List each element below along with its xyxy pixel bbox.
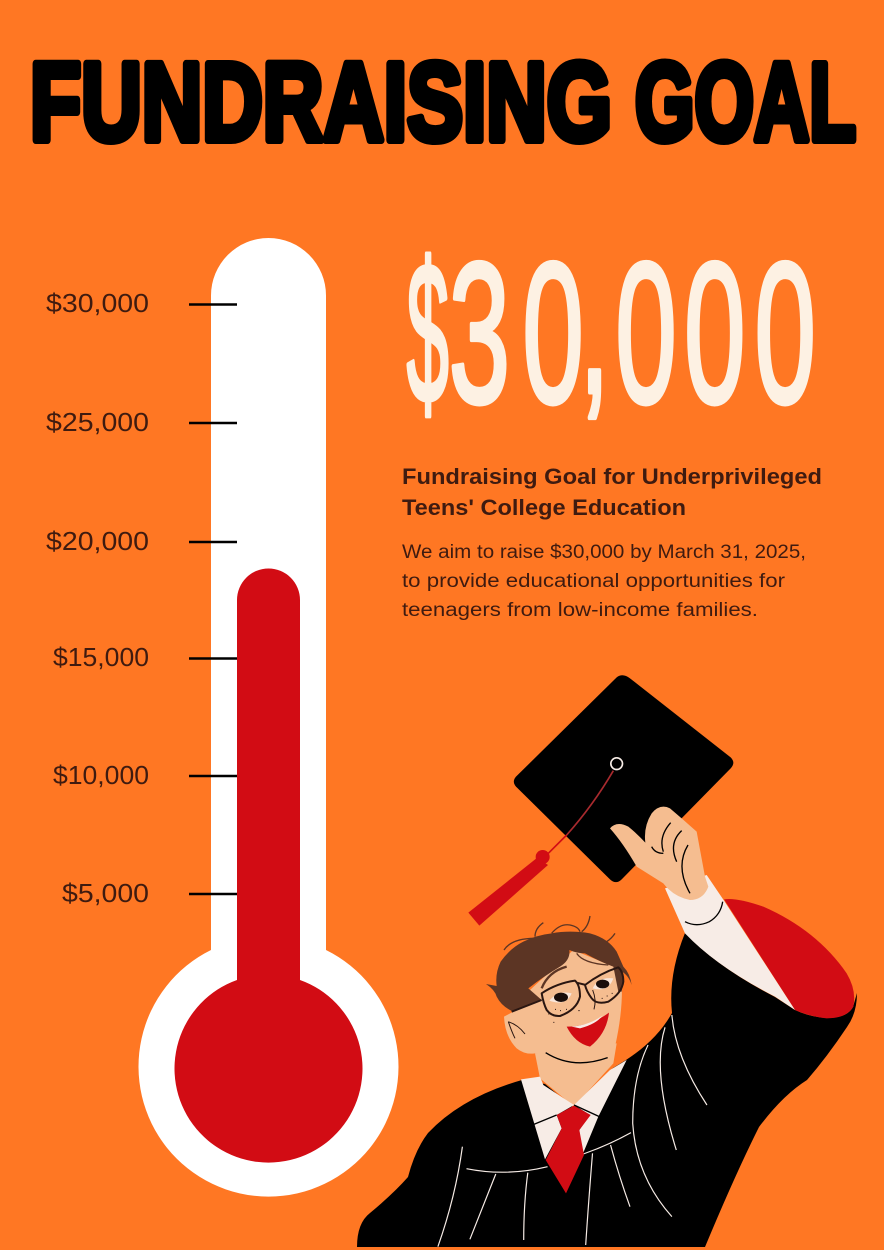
eye whites [549,978,613,1003]
finger lines [652,823,690,893]
thermometer white body [138,238,398,1197]
gown fold lines [438,1015,707,1247]
scale labels: $20,000 [46,528,149,556]
glasses [512,967,623,1016]
tassel [468,858,548,926]
tassel cord below cap [548,835,567,853]
goal description: We aim to raise $30,000 by March 31, 2025, [402,542,806,563]
collar left [521,1077,574,1159]
head [486,916,632,1107]
mouth [567,1013,609,1047]
hand [610,807,708,900]
cuff line [685,902,723,925]
gown [357,933,857,1247]
hair [486,932,632,1012]
graduate illustration [357,675,857,1247]
jaw line [546,1053,608,1063]
collar edge lines [532,1105,599,1125]
shirt cuff [665,875,795,1010]
scale labels [46,290,149,908]
button ring [611,758,622,769]
goal description [402,542,806,621]
tie [546,1106,591,1193]
collar right [574,1060,627,1157]
scale labels: $30,000 [46,290,149,318]
freckles [548,993,613,1022]
mortarboard [514,675,733,882]
cap and hand [468,675,733,926]
goal description: to provide educational opportunities for [402,571,786,592]
hair curls [504,916,615,965]
shirt collar and tie [521,1060,627,1193]
sleeve lining [724,899,854,1018]
raised arm sleeve [665,875,854,1018]
tassel knot [536,850,550,864]
nose line [593,990,595,1009]
eyebrow [542,967,567,988]
goal heading [402,464,822,520]
goal description: teenagers from low-income families. [402,600,758,621]
scale labels: $25,000 [46,409,149,437]
teeth [572,1015,603,1028]
eyes [554,980,609,1002]
scale labels: $5,000 [62,880,149,908]
scale ticks [189,304,237,894]
title: FUNDRAISING [30,41,612,164]
thermometer red fill [174,569,363,1163]
scale labels: $10,000 [53,762,149,790]
goal heading: Teens' College Education [402,495,686,520]
goal amount: 30,000 [449,212,816,445]
tassel cord on cap [567,771,613,835]
goal heading: Fundraising Goal for Underprivileged [402,464,822,489]
neck [535,1043,617,1107]
scale labels: $15,000 [53,644,149,672]
thermometer [138,238,398,1197]
face [504,950,622,1062]
ear line [508,1022,525,1038]
goal amount: $ [407,222,449,446]
